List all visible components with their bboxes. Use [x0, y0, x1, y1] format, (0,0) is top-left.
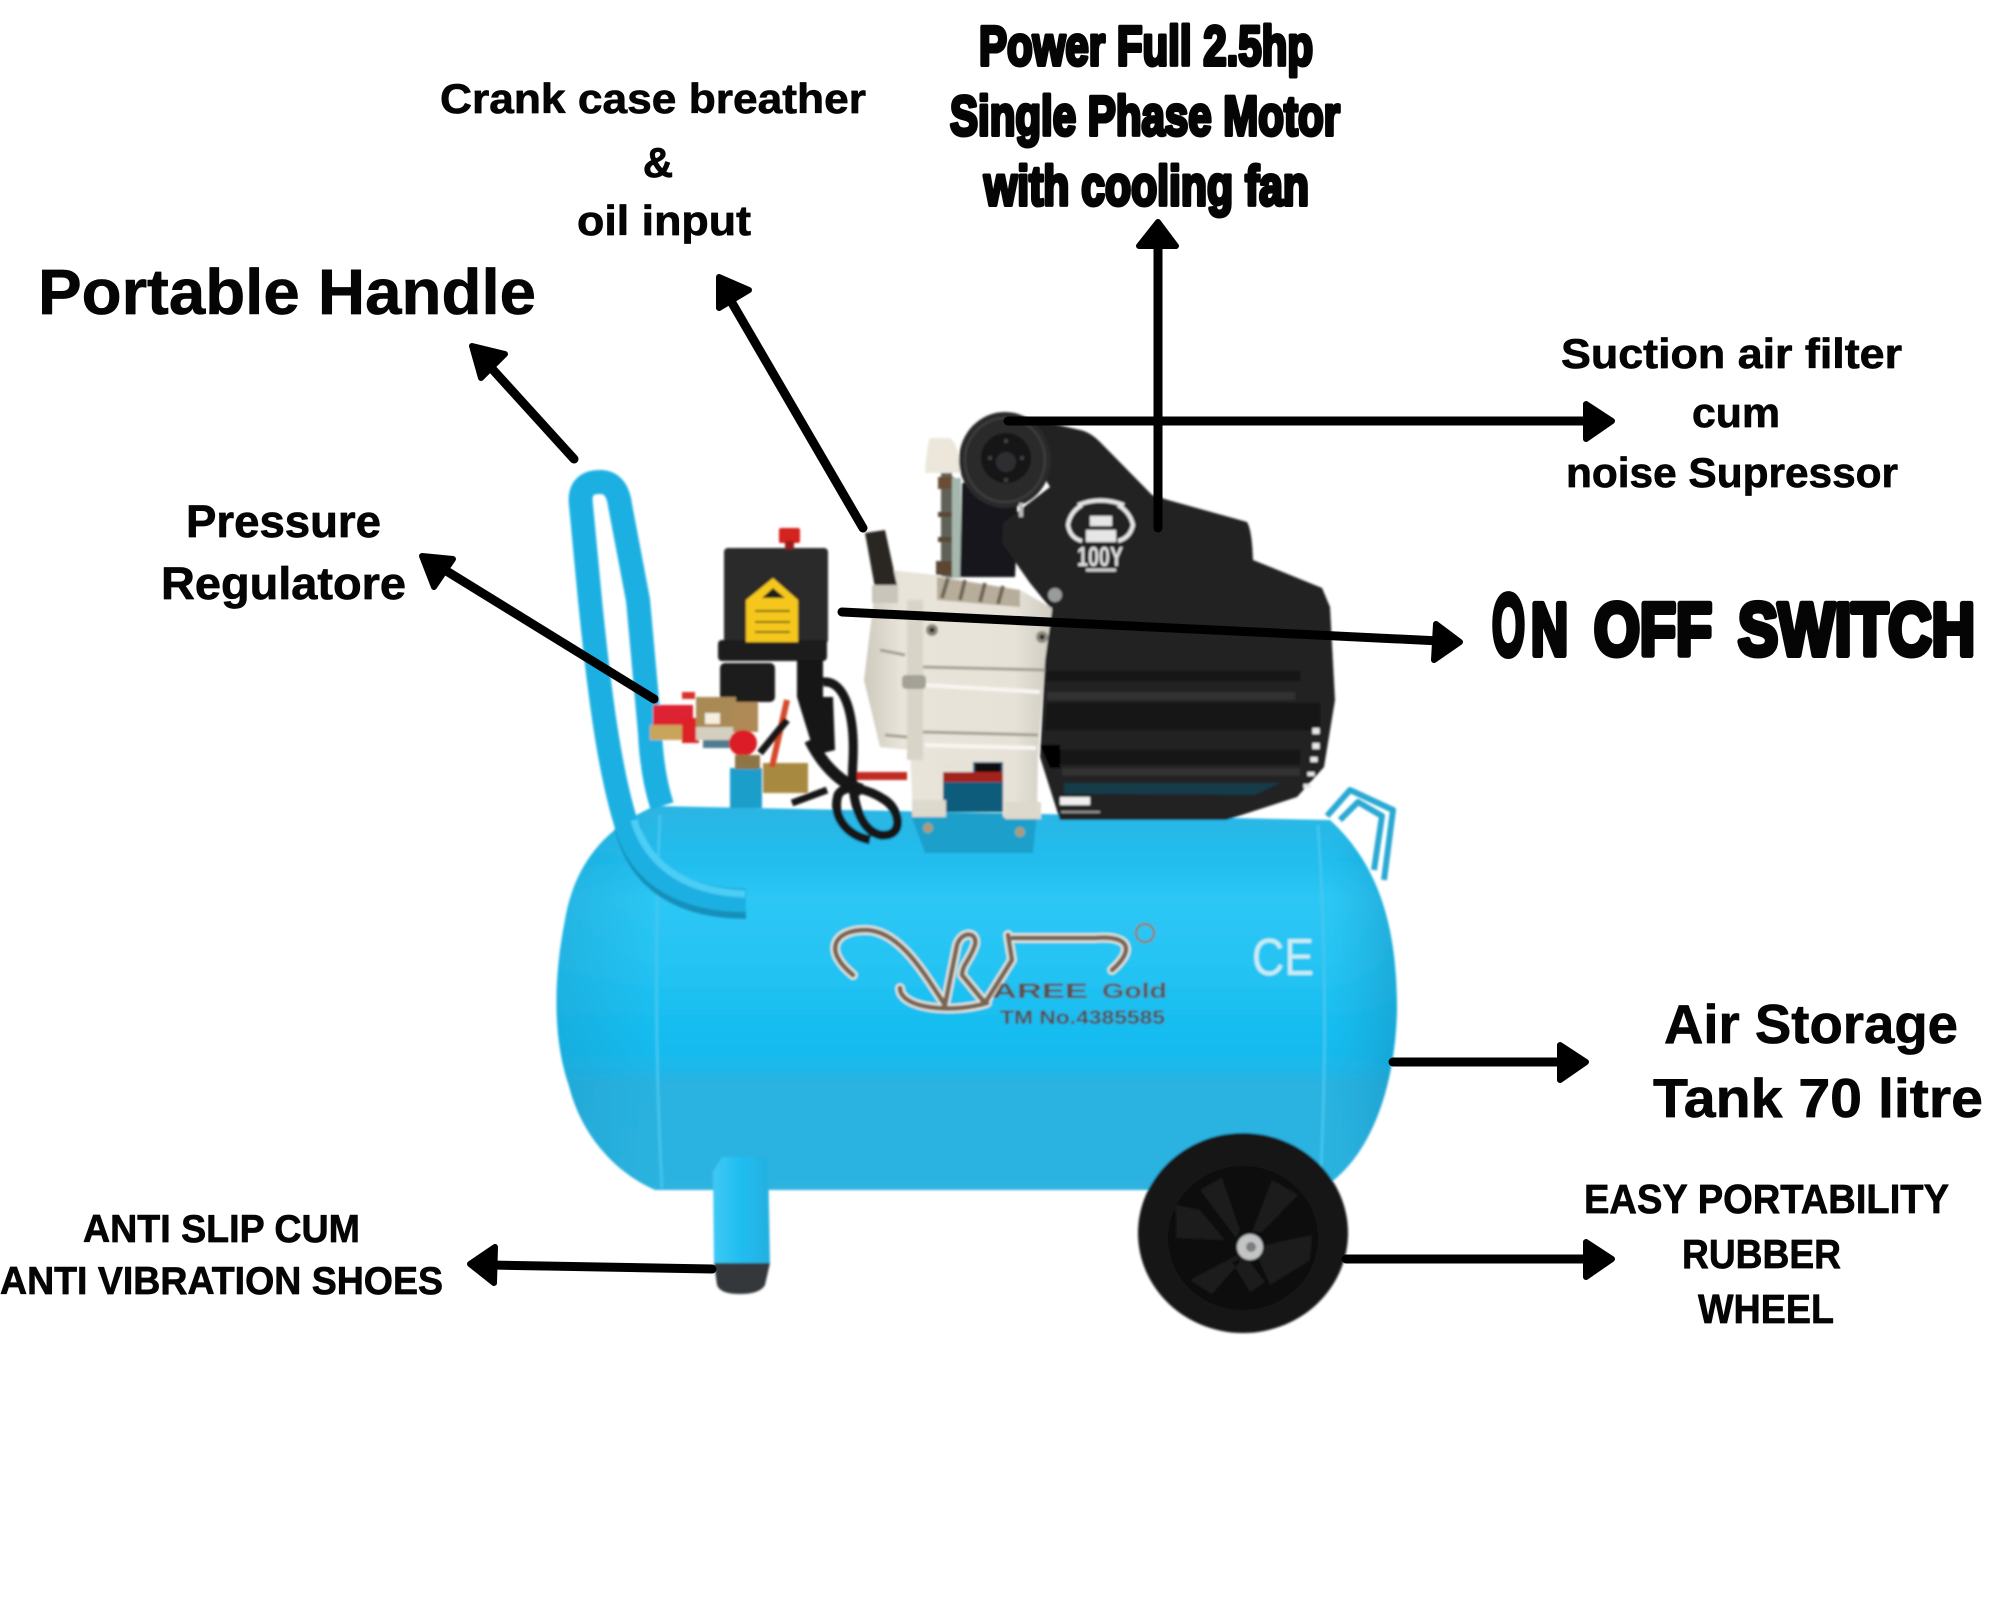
- arrow: suction filter: [1008, 404, 1612, 439]
- label: motor: Single Phase Motor: [950, 84, 1340, 147]
- breather elbow: [872, 585, 898, 603]
- motor vent slots: [1307, 728, 1316, 788]
- air storage tank: [556, 806, 1397, 1190]
- tank brand logo: [835, 924, 1167, 1029]
- power cables: [760, 682, 907, 840]
- cooling fan: [959, 412, 1051, 517]
- label: on off switch: O: [1492, 577, 1525, 674]
- tank brand logo: AREE: [992, 980, 1088, 1003]
- label: pressure regulator: [161, 496, 406, 609]
- label: rubber wheel: RUBBER: [1682, 1231, 1841, 1277]
- label: rubber wheel: EASY PORTABILITY: [1584, 1176, 1949, 1222]
- label: crank case breather: Crank case breather: [440, 75, 866, 122]
- label: crank case breather: [440, 75, 866, 244]
- arrow: pressure regulator: [422, 556, 654, 699]
- air inlet stem: [730, 768, 762, 808]
- portable handle tube: [581, 482, 746, 906]
- label: pressure regulator: Pressure: [186, 496, 381, 547]
- rubber wheel: [1138, 1133, 1348, 1333]
- label: suction air filter: Suction air filter: [1561, 330, 1902, 377]
- pressure switch box: [718, 528, 828, 702]
- label: on off switch: N: [1531, 588, 1568, 671]
- label: pressure regulator: Regulatore: [161, 558, 406, 609]
- label: crank case breather: oil input: [577, 197, 751, 244]
- tank carry handle: [1327, 790, 1393, 880]
- label: portable handle: Portable Handle: [38, 256, 536, 328]
- CE mark: CE: [1252, 929, 1314, 987]
- arrow: crank case breather: [719, 277, 863, 528]
- label: on off switch: OFF: [1594, 588, 1712, 671]
- arrow: anti slip shoes: [470, 1247, 712, 1283]
- arrow: air storage tank: [1393, 1045, 1586, 1080]
- label: anti slip shoes: ANTI SLIP CUM: [83, 1208, 360, 1251]
- arrow: wheel: [1346, 1242, 1612, 1277]
- label: motor: [950, 14, 1340, 217]
- gap behind pump legs: [943, 762, 1003, 812]
- suction filter cap, rods and black hose: [925, 438, 1017, 579]
- label: anti slip shoes: [0, 1208, 443, 1303]
- compressor product illustration: [556, 412, 1397, 1333]
- motor logo: 100Y: [1077, 541, 1123, 572]
- label: anti slip shoes: ANTI VIBRATION SHOES: [0, 1260, 443, 1303]
- pump mount plate: [910, 813, 1037, 853]
- label: on off switch: [1492, 577, 1975, 674]
- motor shroud: [1002, 413, 1335, 820]
- label: air storage tank: [1653, 993, 1983, 1129]
- label: suction air filter: cum: [1692, 389, 1780, 436]
- pressure valve assembly: [650, 692, 808, 793]
- label: rubber wheel: [1584, 1176, 1949, 1332]
- label: crank case breather: &: [643, 139, 673, 186]
- label: suction air filter: [1561, 330, 1902, 496]
- crank case breather tube: [865, 530, 897, 588]
- label: motor: Power Full 2.5hp: [979, 14, 1313, 77]
- tank support foot: [713, 1157, 770, 1294]
- label: motor: with cooling fan: [983, 154, 1309, 217]
- label: air storage tank: Tank 70 litre: [1653, 1067, 1983, 1129]
- label: suction air filter: noise Supressor: [1566, 449, 1898, 496]
- tank brand logo: TM No.4385585: [1000, 1008, 1166, 1029]
- label: rubber wheel: WHEEL: [1698, 1286, 1834, 1332]
- arrow: on off switch: [842, 612, 1460, 660]
- arrow: portable handle: [472, 346, 574, 459]
- arrow: motor: [1139, 222, 1176, 528]
- label: air storage tank: Air Storage: [1664, 993, 1958, 1055]
- motor logo: [1068, 500, 1133, 572]
- silver compressor pump body: [864, 570, 1052, 837]
- tank brand logo: Gold: [1102, 980, 1167, 1003]
